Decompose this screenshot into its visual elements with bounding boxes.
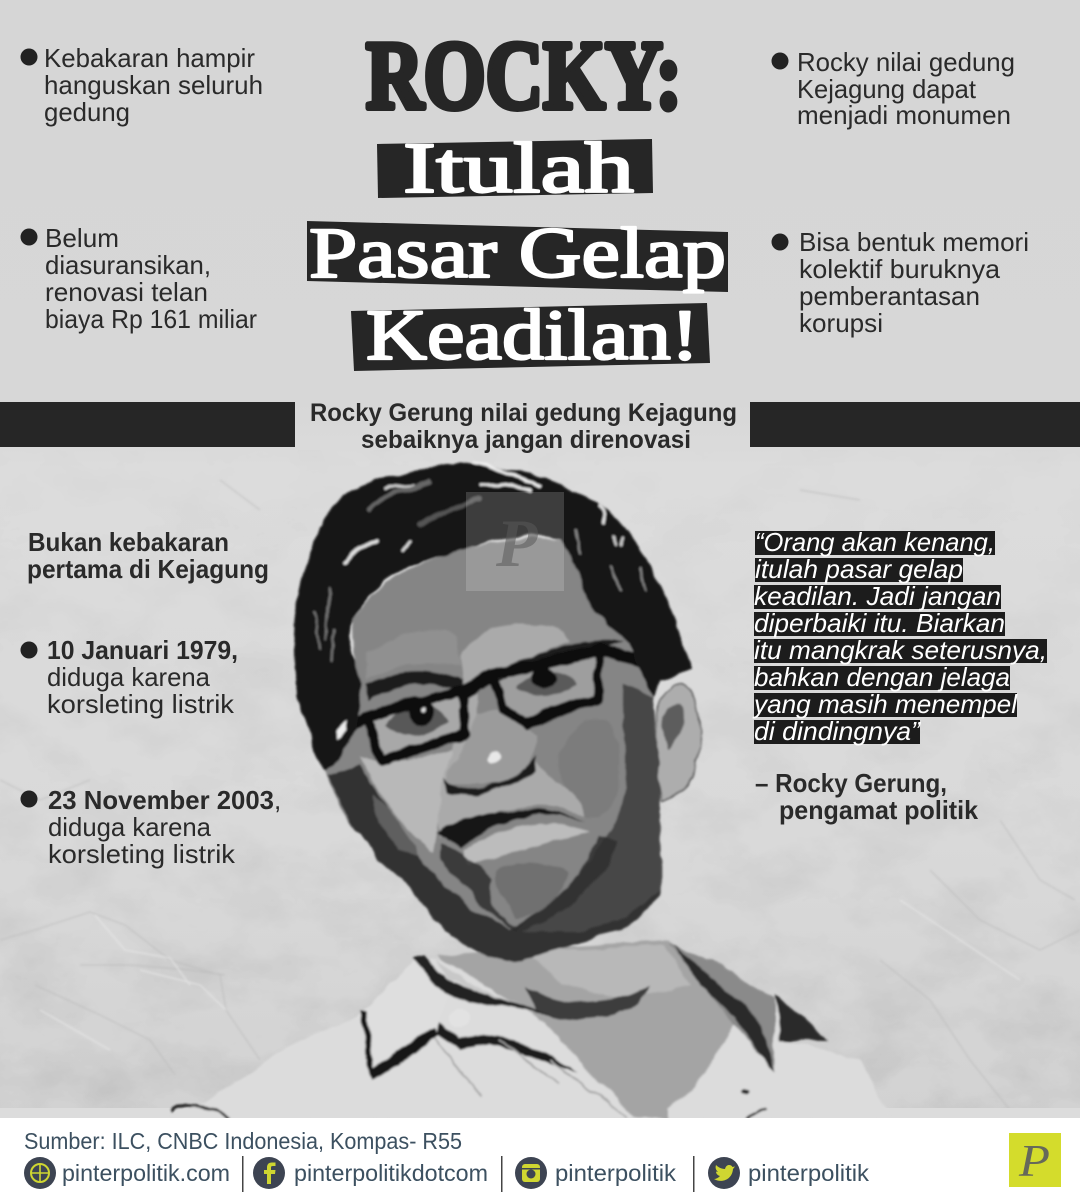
quote: yang masih menempel <box>752 689 1018 719</box>
subtitle: sebaiknya jangan direnovasi <box>361 426 691 454</box>
quote: “Orang akan kenang, <box>755 527 995 557</box>
mouth <box>437 810 585 846</box>
icon: instagram <box>515 1157 547 1189</box>
black band right <box>750 402 1080 447</box>
bullet: asuransi: renovasi telan <box>45 277 208 307</box>
heading: fire history: pertama di Kejagung <box>27 554 269 584</box>
icon: facebook <box>253 1157 285 1189</box>
quote: itu mangkrak seterusnya, <box>754 635 1047 665</box>
bullet: memori kolektif: Bisa bentuk memori <box>799 227 1029 257</box>
quote attribution: pengamat politik <box>779 795 979 825</box>
bullet: asuransi <box>20 223 257 334</box>
bullet: monumen: Kejagung dapat <box>797 74 977 104</box>
footer: pinterpolitikdotcom <box>294 1160 488 1186</box>
quote: bahkan dengan jelaga <box>754 662 1010 692</box>
bullet: monumen <box>772 47 1015 130</box>
lenses <box>365 690 465 761</box>
hair highlights <box>315 462 646 660</box>
shirt <box>165 945 890 1118</box>
glasses <box>365 690 465 761</box>
background: crumpled paper <box>0 780 1080 1108</box>
bullet: monumen: Rocky nilai gedung <box>797 47 1015 77</box>
bullet: asuransi: Belum <box>45 223 119 253</box>
quote: itulah pasar gelap <box>755 554 963 584</box>
quote attribution: – Rocky Gerung, <box>755 768 947 798</box>
hair <box>293 464 692 772</box>
left cheek <box>360 747 460 853</box>
bullet: 2003: korsleting listrik <box>48 839 236 869</box>
quote: diperbaiki itu. Biarkan <box>754 608 1005 638</box>
title block: Pasar Gelap: Pasar Gelap <box>309 213 726 293</box>
right cheek shadow <box>517 684 661 932</box>
heading: fire history <box>27 527 269 584</box>
bullet: 1979: 10 Januari 1979, <box>47 635 238 665</box>
title block: Keadilan: Keadilan! <box>366 295 699 375</box>
right collar <box>668 943 775 1072</box>
bullet: kebakaran <box>20 43 263 127</box>
black band left <box>0 402 295 447</box>
brows <box>367 671 463 701</box>
title block: Itulah <box>377 128 653 208</box>
jaw shadow <box>328 764 661 963</box>
heading: fire history: Bukan kebakaran <box>28 527 229 557</box>
footer <box>0 1118 1080 1200</box>
title block: Itulah: Itulah <box>403 128 634 208</box>
bullet: kebakaran: hanguskan seluruh <box>44 70 263 100</box>
subtitle <box>310 399 737 454</box>
quote: keadilan. Jadi jangan <box>754 581 1001 611</box>
eyes <box>383 706 450 735</box>
bullet: asuransi: biaya Rp 161 miliar <box>45 304 257 334</box>
icon: web <box>24 1157 56 1189</box>
bullet: 1979: korsleting listrik <box>47 689 235 719</box>
bullet: kebakaran: Kebakaran hampir <box>44 43 255 73</box>
bullet: kebakaran: gedung <box>44 97 130 127</box>
footer: pinterpolitik.com <box>62 1160 230 1186</box>
left collar <box>358 959 455 1075</box>
portrait of Rocky Gerung <box>165 462 890 1118</box>
bullet: 2003: , <box>274 785 281 815</box>
bullet: 2003: 23 November 2003 <box>48 785 274 815</box>
watermark: P <box>495 505 538 581</box>
shirt marks <box>740 1089 748 1095</box>
bullet: 2003 <box>20 785 281 869</box>
bullet: 1979: diduga karena <box>47 662 211 692</box>
logo <box>1009 1133 1061 1187</box>
footer: pinterpolitik <box>748 1160 870 1186</box>
bullet: monumen: menjadi monumen <box>797 100 1011 130</box>
logo: P <box>1018 1135 1050 1186</box>
title: ROCKY: ROCKY: <box>366 22 682 130</box>
brow and nose light <box>438 624 583 836</box>
neck <box>436 940 736 1118</box>
bullet: asuransi: diasuransikan, <box>45 250 211 280</box>
ear <box>657 684 701 803</box>
source line: Sumber: ILC, CNBC Indonesia, Kompas- R55 <box>24 1128 462 1154</box>
quote: di dindingnya” <box>754 716 921 746</box>
bullet: memori kolektif: pemberantasan <box>799 281 980 311</box>
bullet: memori kolektif: korupsi <box>799 308 883 338</box>
quote attribution <box>755 768 979 825</box>
bullet: memori kolektif <box>772 227 1029 338</box>
quote <box>752 527 1047 746</box>
subtitle: Rocky Gerung nilai gedung Kejagung <box>310 399 737 427</box>
icon: twitter <box>708 1157 740 1189</box>
bullet: 1979 <box>20 635 238 719</box>
face base <box>327 539 661 931</box>
bullet: 2003: diduga karena <box>48 812 212 842</box>
watermark <box>466 492 564 591</box>
footer: pinterpolitik <box>555 1160 677 1186</box>
bullet: memori kolektif: kolektif buruknya <box>799 254 1001 284</box>
